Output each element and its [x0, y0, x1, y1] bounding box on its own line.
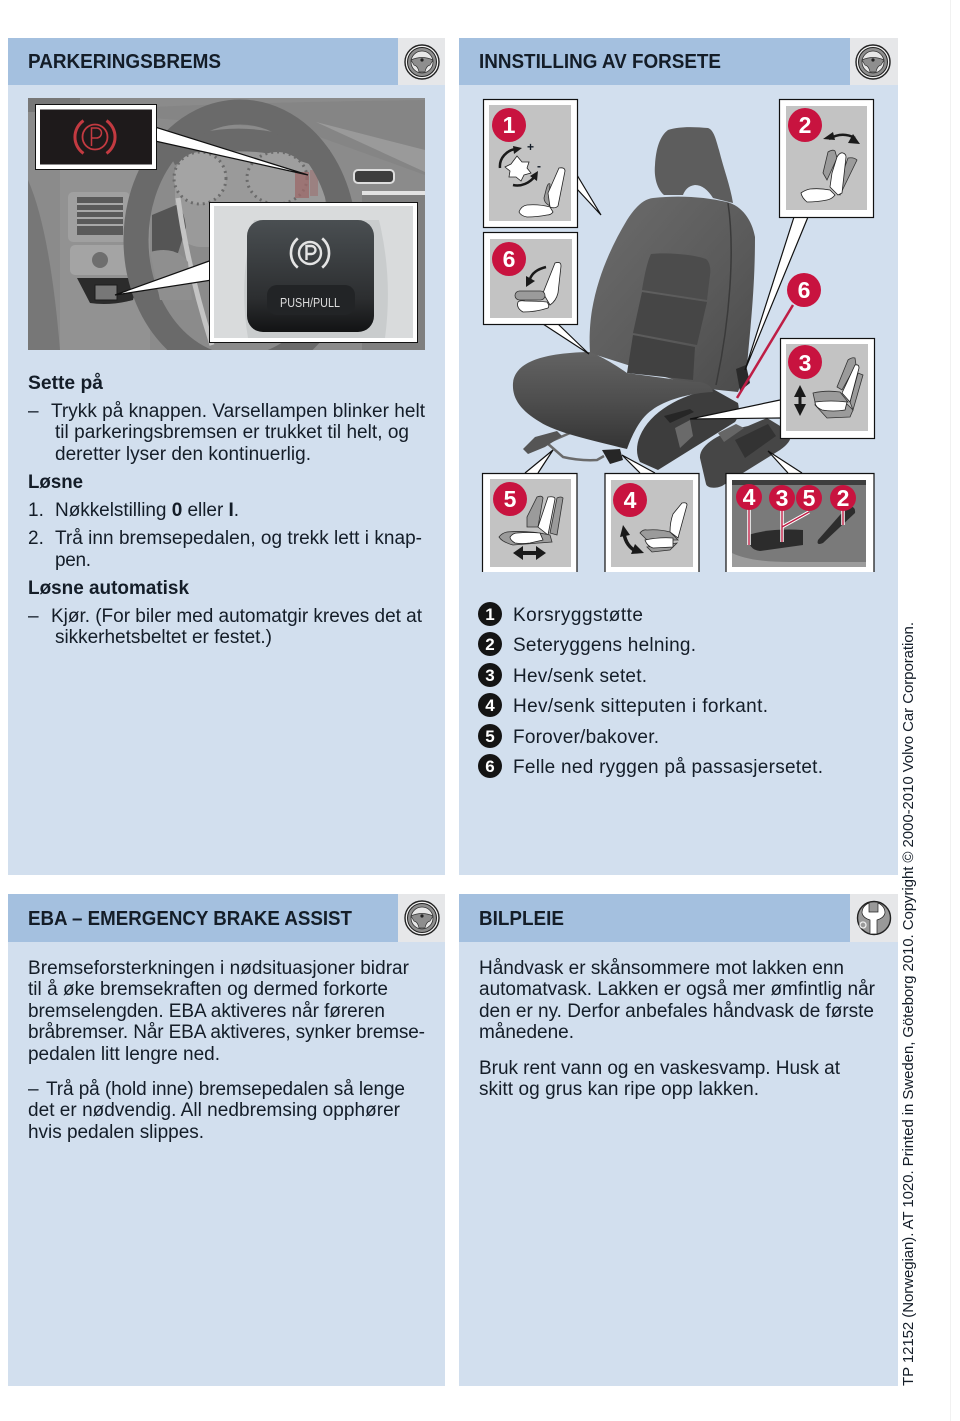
text block: bilpleie advice: månedene.	[479, 1022, 574, 1043]
callout box 4: seat cushion front: 4	[624, 487, 637, 513]
icon: steering wheel	[398, 38, 445, 85]
text block: EBA description	[28, 958, 425, 1143]
red marker: passenger backrest 6: 6	[798, 277, 810, 303]
text block: parkeringsbrems instructions: –	[28, 606, 39, 627]
heading band: parkeringsbrems: PARKERINGSBREMS	[28, 51, 221, 73]
text block: bilpleie advice: Bruk rent vann og en vaskesvamp. Husk at	[479, 1058, 841, 1079]
numbered list: seat adjustments: Seteryggens helning.	[513, 635, 696, 656]
text block: EBA description: hvis pedalen slippes.	[28, 1122, 204, 1143]
text block: parkeringsbrems instructions	[28, 373, 426, 648]
text block: parkeringsbrems instructions: 1.	[28, 500, 44, 521]
heading band: bilpleie	[459, 894, 850, 942]
numbered list: seat adjustments: Forover/bakover.	[513, 727, 659, 748]
text block: EBA description: bråbremser. Når EBA aktiveres, synker bremse-	[28, 1022, 425, 1043]
text block: parkeringsbrems instructions: deretter lyser den kontinuerlig.	[55, 444, 311, 465]
numbered list: seat adjustments: 5	[485, 727, 495, 746]
text block: parkeringsbrems instructions: sikkerhetsbeltet er festet.)	[55, 627, 272, 648]
numbered list: seat adjustments: 2	[485, 635, 495, 654]
text block: parkeringsbrems instructions: Sette på	[28, 373, 103, 394]
callout box 6: fold passenger seat: 6	[503, 246, 515, 272]
callout box: seat control buttons: 3	[776, 485, 788, 511]
icon: steering wheel	[850, 38, 898, 85]
text block: parkeringsbrems instructions: –	[28, 401, 39, 422]
photo: dashboard with parking brake	[28, 98, 425, 368]
text block: parkeringsbrems instructions: Løsne automatisk	[28, 578, 189, 599]
numbered list: seat adjustments: Hev/senk sitteputen i forkant.	[513, 696, 768, 717]
callout pointer: warning lamp	[155, 127, 308, 175]
callout box 5: forward and back: 5	[504, 486, 517, 512]
callout box: seat control buttons: 4	[743, 484, 756, 510]
panel: innstilling av forsete	[459, 38, 898, 875]
text block: parkeringsbrems instructions: 2.	[28, 528, 44, 549]
text block: bilpleie advice: automatvask. Lakken er også mer ømfintlig når	[479, 979, 876, 1000]
callout pointer: button	[115, 260, 212, 295]
text block: EBA description: Trå på (hold inne) bremsepedalen så lenge	[46, 1079, 405, 1100]
text block: EBA description: Bremseforsterkningen i nødsituasjoner bidrar	[28, 958, 410, 979]
heading band: parkeringsbrems	[8, 38, 398, 85]
red marker: passenger backrest 6	[737, 273, 821, 398]
text block: parkeringsbrems instructions: Nøkkelstilling 0 eller I.	[55, 500, 239, 521]
heading band: EBA	[8, 894, 398, 942]
callout box 1: lumbar support: 1	[503, 112, 516, 138]
callout: PUSH/PULL button: PUSH/PULL	[280, 296, 340, 310]
numbered list: seat adjustments: 4	[485, 696, 495, 715]
callout: warning lamp	[36, 104, 156, 170]
text block: bilpleie advice: Håndvask er skånsommere mot lakken enn	[479, 958, 844, 979]
panel: parkeringsbrems	[8, 38, 445, 875]
callout box 3: raise or lower seat: 3	[799, 350, 811, 376]
text block: parkeringsbrems instructions: til parkeringsbremsen er trukket til helt, og	[55, 422, 409, 443]
text block: parkeringsbrems instructions: Kjør. (For biler med automatgir kreves det at	[51, 606, 423, 627]
heading band: innstilling av forsete: INNSTILLING AV FORSETE	[479, 51, 721, 73]
vertical copyright text: TP 12152 (Norwegian). AT 1020. Printed in Sweden, Göteborg 2010. Copyright © 2000-2010 Volvo Car Corporation.	[900, 622, 917, 1386]
numbered list: seat adjustments: Korsryggstøtte	[513, 605, 643, 626]
callout box 4: seat cushion front	[605, 474, 699, 572]
callout box: seat control buttons	[726, 474, 874, 572]
callout: PUSH/PULL button	[210, 202, 418, 342]
text block: EBA description: til å øke bremsekraften og dermed forkorte	[28, 979, 388, 1000]
heading band: EBA: EBA – EMERGENCY BRAKE ASSIST	[28, 908, 352, 930]
illustration: door control panel	[700, 418, 791, 488]
callout box 5: forward and back	[482, 474, 577, 572]
text block: parkeringsbrems instructions: pen.	[55, 550, 91, 571]
text block: EBA description: pedalen litt lengre ned.	[28, 1044, 220, 1065]
text block: parkeringsbrems instructions: Trykk på knappen. Varsellampen blinker helt	[51, 401, 426, 422]
callout box 1: lumbar support	[484, 100, 578, 228]
callout box: seat control buttons: 2	[837, 485, 849, 511]
callout box 1: lumbar support: -	[537, 159, 541, 173]
numbered list: seat adjustments: Felle ned ryggen på passasjersetet.	[513, 757, 823, 778]
text block: EBA description: bremselengden. EBA aktiveres når føreren	[28, 1001, 385, 1022]
text block: parkeringsbrems instructions: Løsne	[28, 472, 83, 493]
icon: wrench	[850, 894, 898, 942]
text block: bilpleie advice: den er ny. Derfor anbefales håndvask de første	[479, 1001, 874, 1022]
numbered list: seat adjustments: 3	[485, 666, 495, 685]
callout box: seat control buttons: 5	[803, 485, 816, 511]
callout pointers	[525, 175, 808, 473]
callout box 6: fold passenger seat	[484, 232, 578, 324]
icon: steering wheel	[398, 894, 445, 942]
callout box 2: backrest tilt: 2	[799, 112, 811, 138]
numbered list: seat adjustments: 6	[485, 757, 495, 776]
illustration: front seat	[513, 127, 755, 470]
text block: EBA description: –	[28, 1079, 39, 1100]
panel: EBA	[8, 894, 445, 1386]
heading band: bilpleie: BILPLEIE	[479, 908, 564, 930]
heading band: innstilling av forsete	[459, 38, 850, 85]
numbered list: seat adjustments: Hev/senk setet.	[513, 666, 647, 687]
text block: parkeringsbrems instructions: Trå inn bremsepedalen, og trekk lett i knap-	[55, 528, 422, 549]
callout box 3: raise or lower seat	[780, 338, 874, 438]
callout box 1: lumbar support: +	[527, 140, 534, 154]
text block: EBA description: det er nødvendig. All nedbremsing opphører	[28, 1100, 401, 1121]
text block: bilpleie advice	[479, 958, 876, 1100]
text block: bilpleie advice: skitt og grus kan ripe opp lakken.	[479, 1079, 759, 1100]
panel: bilpleie	[459, 894, 898, 1386]
numbered list: seat adjustments	[478, 602, 823, 778]
numbered list: seat adjustments: 1	[485, 605, 495, 624]
callout box 2: backrest tilt	[780, 100, 874, 218]
